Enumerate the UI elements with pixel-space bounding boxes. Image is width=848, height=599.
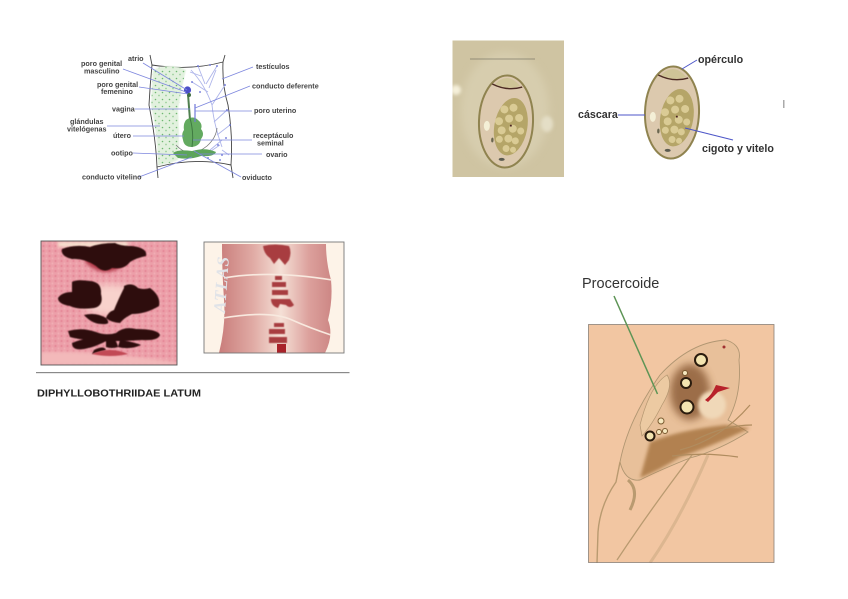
oil droplets: [646, 354, 707, 440]
leader lines: [107, 63, 262, 177]
caption: DIPHYLLOBOTHRIIDAE LATUM: [37, 388, 201, 400]
diagram labels: testículos: [256, 62, 290, 71]
horizontal divider: [36, 372, 350, 373]
diagram labels: seminal: [257, 138, 284, 148]
diagram labels: receptáculo: [253, 131, 294, 140]
vitelline glands: [151, 66, 186, 165]
procercoid label: Procercoide: [582, 276, 659, 292]
photo: stained proglottid uterus, close-up: [41, 241, 177, 365]
procercoid pointer line: [614, 296, 658, 394]
egg labels: [578, 54, 774, 155]
testes branches: [190, 66, 230, 155]
ATLAS watermark: ATLAS: [210, 255, 233, 314]
diagram labels: oviducto: [242, 173, 273, 182]
diagram labels: poro genital: [81, 59, 122, 68]
diagram labels: ovario: [266, 150, 288, 159]
diagram labels: poro uterino: [254, 106, 297, 115]
egg leader lines: [618, 60, 733, 140]
egg labels: opérculo: [698, 54, 744, 66]
photo: copepod with procercoid: [588, 324, 774, 563]
labelled egg diagram: [578, 54, 784, 159]
copepod body: [620, 340, 748, 480]
diagram labels: vitelógenas: [67, 124, 107, 134]
diagram labels: conducto deferente: [252, 82, 319, 90]
uterus and ovary: [173, 86, 217, 159]
diagram labels: útero: [113, 131, 132, 140]
diagram labels: masculino: [84, 66, 120, 76]
diagram labels: conducto vitelino: [82, 172, 142, 182]
diagram labels: femenino: [101, 87, 134, 96]
photo: stained proglottid segments, "ATLAS": [204, 242, 344, 353]
bristles: [672, 405, 752, 457]
diagram labels: poro genital: [97, 80, 138, 89]
diagram labels: ootipo: [111, 148, 134, 158]
egg micrograph photo: [451, 40, 564, 177]
diagram labels: vagina: [112, 104, 136, 114]
tail and antennae: [597, 455, 708, 563]
diagram labels: [67, 54, 319, 182]
proglottid outline: [149, 55, 233, 178]
anatomy diagram: adult proglottid with labels: [67, 54, 319, 182]
egg labels: cigoto y vitelo: [702, 143, 774, 155]
diagram labels: atrio: [128, 54, 144, 63]
egg labels: cáscara: [578, 109, 619, 121]
diagram labels: glándulas: [70, 117, 104, 126]
